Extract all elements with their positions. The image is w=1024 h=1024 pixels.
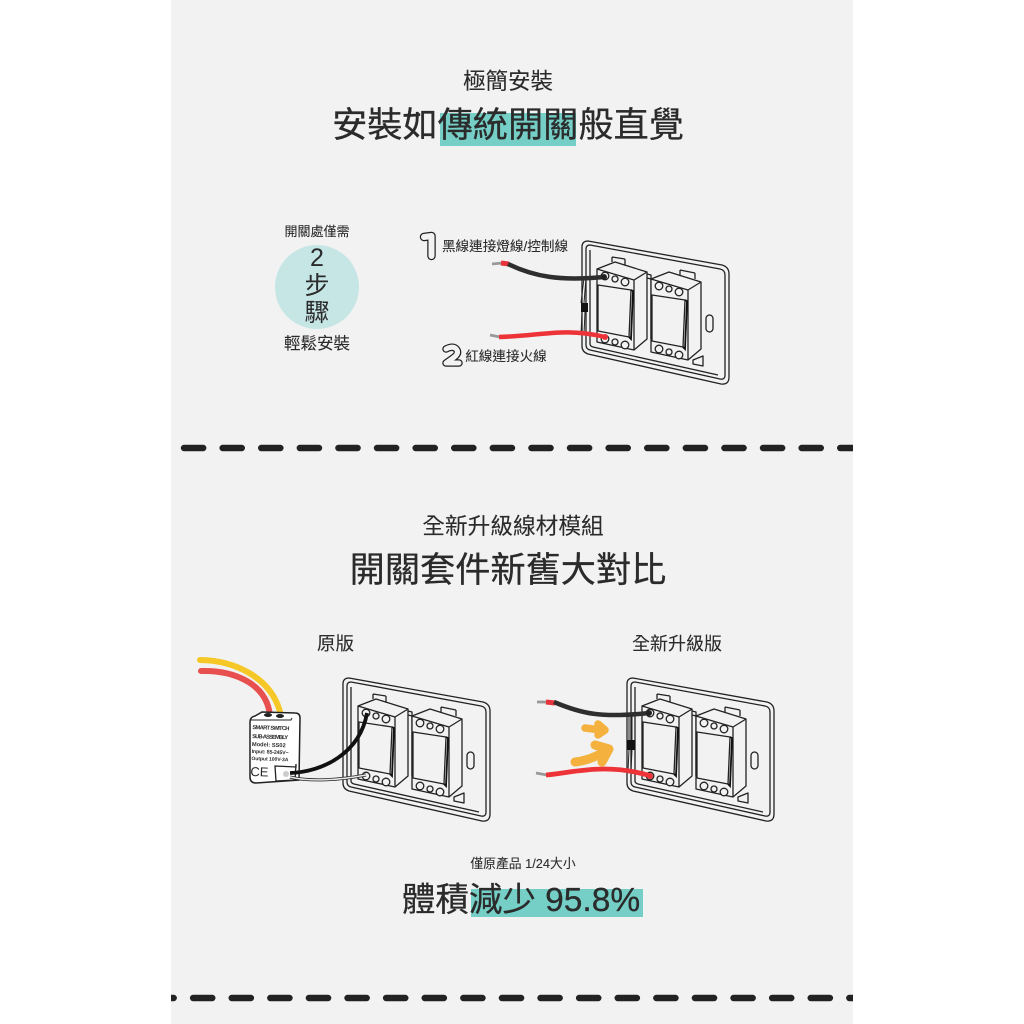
black wire xyxy=(537,702,652,716)
label: original: 原版 xyxy=(317,633,354,654)
step 1 label: 黑線連接燈線/控制線 xyxy=(442,238,568,254)
circle text: 驟 xyxy=(304,299,330,327)
switch plate xyxy=(343,678,490,821)
diagram: switch wiring steps xyxy=(424,236,729,384)
module label: SMART SWITCH xyxy=(252,725,290,732)
circle text: 2 xyxy=(310,244,324,272)
result text: 體積減少 95.8% xyxy=(402,882,640,919)
callout: 2 steps xyxy=(275,224,359,353)
arrow: small orange xyxy=(585,724,605,735)
connector block xyxy=(627,740,635,750)
red wire xyxy=(490,332,608,340)
module label xyxy=(250,725,290,780)
title: 安裝如傳統開關般直覺 xyxy=(332,106,684,145)
circle text: 步 xyxy=(304,272,330,300)
module box xyxy=(250,712,300,783)
circle text xyxy=(304,244,330,327)
result block xyxy=(402,882,643,919)
black wire xyxy=(492,263,607,280)
title: 開關套件新舊大對比 xyxy=(350,551,666,590)
diagram: original kit xyxy=(200,660,490,821)
teal circle xyxy=(275,245,359,329)
callout top text: 開關處僅需 xyxy=(284,224,350,239)
diagram: upgraded kit xyxy=(536,678,774,821)
grey wire xyxy=(290,775,366,780)
callout bottom text: 輕鬆安裝 xyxy=(284,334,350,353)
module label: Input: 85-245V~ xyxy=(252,749,289,756)
yellow wire xyxy=(200,660,281,716)
subtitle: 極簡安裝 xyxy=(463,69,553,94)
switch plate xyxy=(627,678,774,821)
icon: outlined number 1 xyxy=(424,236,432,256)
module label: CE xyxy=(250,764,269,780)
arrow: large orange xyxy=(575,745,609,762)
step 2 label: 紅線連接火線 xyxy=(465,348,547,364)
module label: Output 100V-3A xyxy=(251,756,289,763)
heading block: comparison xyxy=(350,513,666,590)
page background panel xyxy=(171,0,853,1024)
red wire xyxy=(536,769,653,779)
dashed divider top xyxy=(184,445,853,451)
switch plate xyxy=(582,241,729,384)
title highlight xyxy=(440,113,576,146)
connector block xyxy=(581,303,588,312)
label: upgraded: 全新升級版 xyxy=(632,634,722,654)
subtitle: 全新升級線材模組 xyxy=(422,513,604,539)
heading block: minimal install xyxy=(332,69,684,146)
module label: Model: SS02 xyxy=(252,742,286,749)
black wire xyxy=(290,713,367,773)
caption: 僅原產品 1/24大小 xyxy=(470,856,576,871)
icon: outlined number 2 xyxy=(446,347,459,363)
thin connector wires xyxy=(581,278,586,334)
red wire xyxy=(201,671,270,716)
dashed divider bottom xyxy=(154,995,853,1001)
result highlight xyxy=(471,889,643,917)
thin connector wires xyxy=(628,715,632,771)
module label: SUB-ASSEMBLY xyxy=(252,734,288,741)
